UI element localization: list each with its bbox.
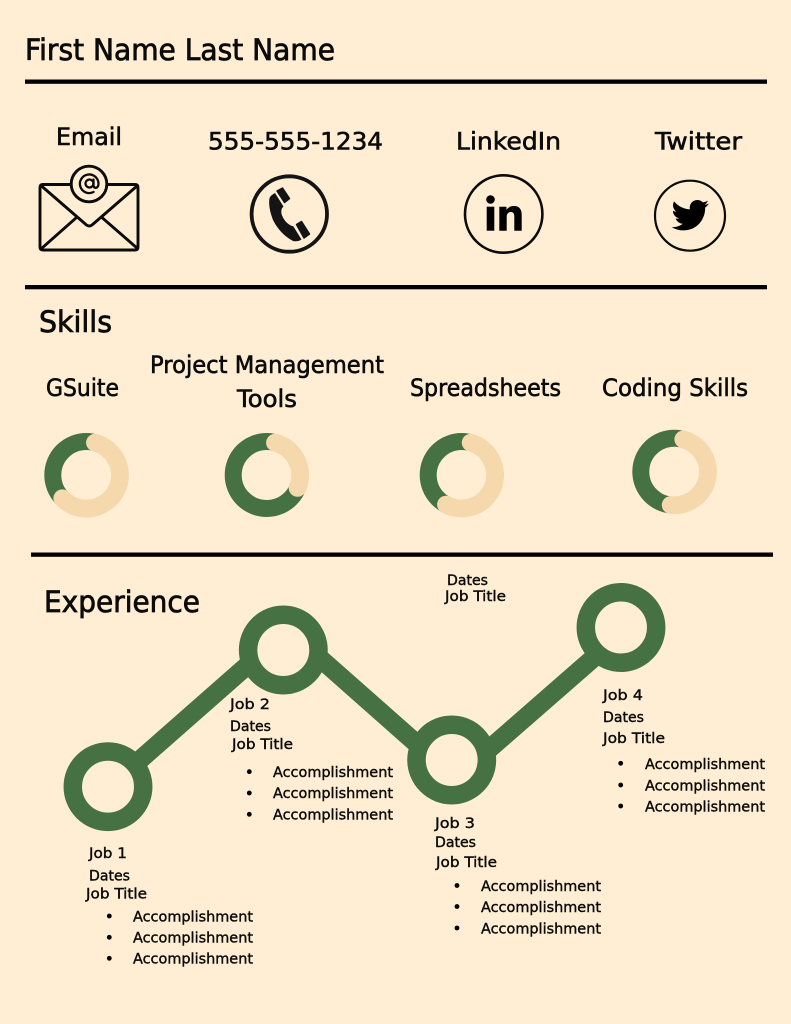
job 1 details: Accomplishment [133,930,253,946]
job 1 details: Accomplishment [133,910,253,926]
job 4 details: Job Title [602,731,665,747]
job 1 details [85,846,253,968]
phone number: 555-555-1234 [208,128,383,156]
job 3 details: Job 3 [434,816,475,832]
job 2 details: Job Title [231,737,293,753]
job 3 details: Job Title [435,855,497,871]
contact: email [40,123,138,250]
contact: twitter [654,128,742,251]
job 1 details: Accomplishment [133,952,253,968]
project management tools label: Project Management [150,351,384,379]
skill: project management tools: Tools [236,385,297,413]
job 1 details: Job Title [85,886,147,902]
skill: project management tools [150,351,384,508]
job 2 details: Job 2 [229,697,270,713]
job 3 details: Dates [435,835,476,851]
panel: skills [39,305,748,509]
stray dates and job title text: Dates [447,573,488,589]
skill: gsuite [46,374,120,509]
spreadsheets label: Spreadsheets [410,374,561,402]
gsuite label: GSuite [46,374,119,402]
skill: spreadsheets [410,374,561,508]
job 1 details: Dates [89,869,130,885]
experience heading: Experience [44,585,200,619]
icon: twitter [655,181,725,251]
job 4 details: Accomplishment [645,800,765,816]
email label: Email [56,123,122,151]
job 4 details: Accomplishment [645,778,765,794]
donut: coding skills [641,438,708,505]
skills heading: Skills [39,305,112,339]
job 2 details: Accomplishment [273,808,393,824]
linkedin label: LinkedIn [456,128,561,156]
job 2 details: Dates [230,719,271,735]
twitter label: Twitter [654,128,742,156]
job 4 details: Dates [603,710,644,726]
skill: coding skills [602,374,748,505]
job 4 details: Job 4 [602,688,643,704]
panel: experience [44,573,765,968]
job 3 details: Accomplishment [481,879,601,895]
donut: spreadsheets [428,442,495,508]
job 2 details [229,697,393,824]
coding skills label: Coding Skills [602,374,748,402]
title: First Name Last Name [25,33,335,67]
job 4 details [602,688,765,816]
donut: gsuite [53,442,120,509]
job 4 details: Accomplishment [645,757,765,773]
job 1 details: Job 1 [88,846,127,862]
contact: linkedin [456,128,561,253]
icon: linkedin [465,175,542,253]
contact: phone [208,128,383,252]
stray dates and job title text [444,573,506,605]
job 3 details [434,816,601,938]
icon: envelope [40,166,138,250]
job 3 details: Accomplishment [481,922,601,938]
icon: telephone [252,176,327,252]
timeline chart [73,592,656,822]
panel: contact [40,123,742,253]
stray dates and job title text: Job Title [444,589,506,605]
job 3 details: Accomplishment [481,900,601,916]
job 2 details: Accomplishment [273,765,393,781]
job 2 details: Accomplishment [273,786,393,802]
donut: project management tools [233,442,300,508]
